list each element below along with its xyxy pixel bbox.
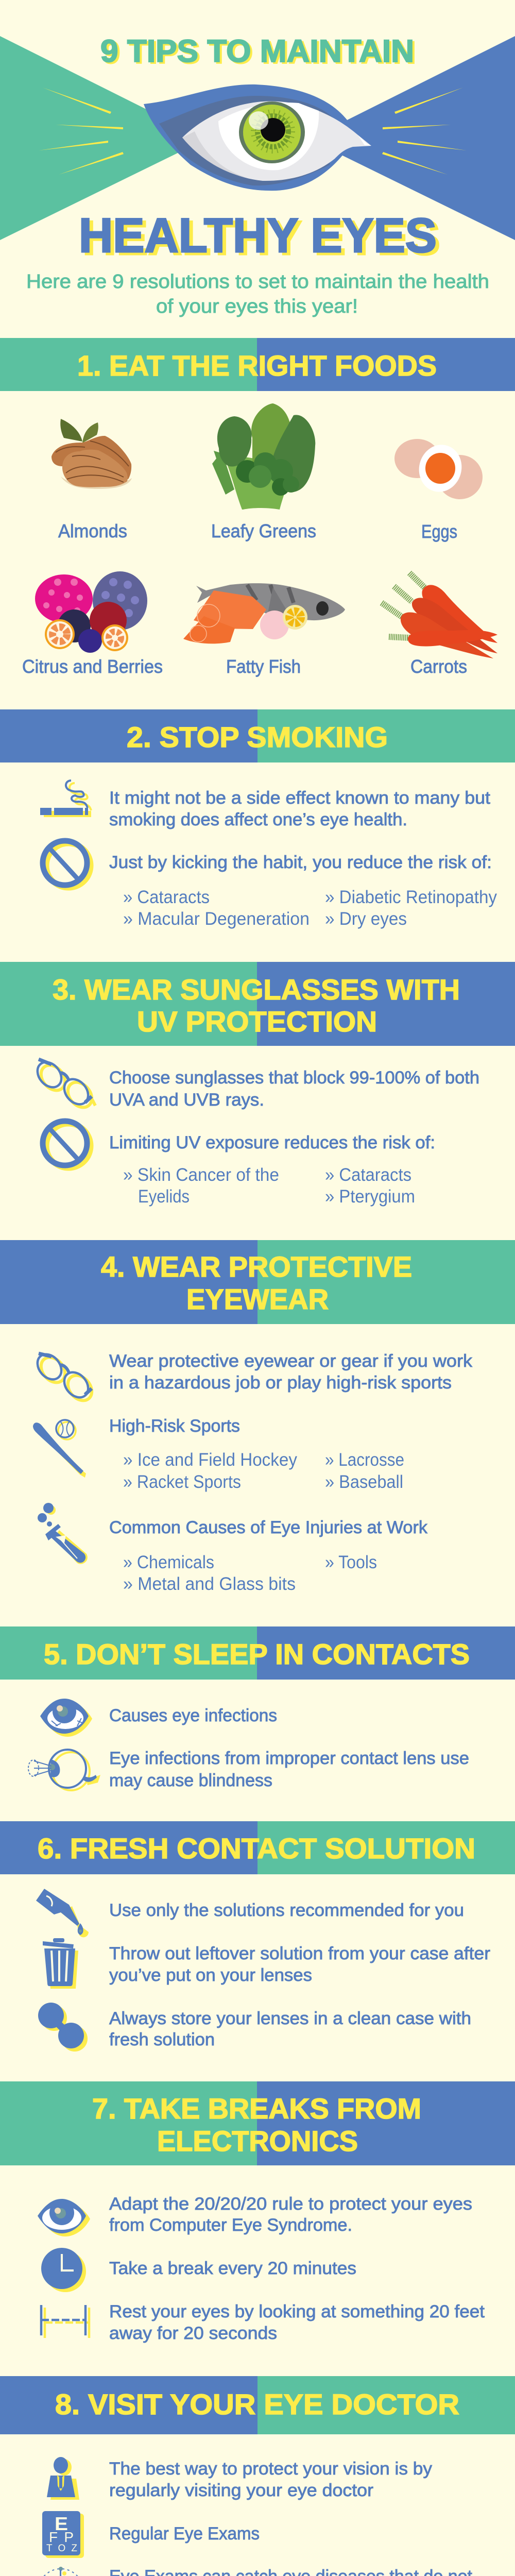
food: fatty fish [183, 583, 345, 643]
text: smoking: Just by kicking the habit, you reduce the risk of: [109, 853, 492, 872]
icon: eye chart: T O Z [46, 2543, 77, 2554]
section 6: fresh contact solution [0, 1821, 515, 2052]
text: protective eyewear: in a hazardous job or play high-risk sports [109, 1373, 452, 1393]
text: doctor [109, 2459, 473, 2576]
list: smoking risks: » Macular Degeneration [123, 909, 310, 929]
list: causes at work [123, 1552, 377, 1594]
section 7: take breaks from electronics [0, 2081, 515, 2343]
text: sunglasses: UVA and UVB rays. [109, 1090, 264, 1110]
heading band 4 [0, 1240, 515, 1324]
food labels: Leafy Greens [211, 520, 316, 541]
icon: eye chart: F P [49, 2529, 74, 2545]
list: high-risk sports: » Racket Sports [123, 1472, 241, 1492]
icon: doctor [47, 2457, 79, 2500]
heading band 4: EYEWEAR [186, 1283, 329, 1315]
text: sunglasses: Limiting UV exposure reduces the risk of: [109, 1133, 435, 1153]
food labels: Fatty Fish [226, 656, 301, 677]
heading band 2 [0, 709, 515, 762]
heading band 3: 3. WEAR SUNGLASSES WITH [53, 973, 460, 1006]
eye illustration [144, 84, 371, 191]
subtitle [26, 271, 489, 317]
header panel [0, 33, 515, 317]
text: doctor: The best way to protect your vision is by [109, 2459, 432, 2479]
text: breaks: away for 20 seconds [109, 2324, 277, 2343]
text: doctor: Regular Eye Exams [109, 2524, 260, 2544]
text: protective eyewear: Common Causes of Eye Injuries at Work [109, 1518, 428, 1537]
heading band 8 [0, 2376, 515, 2434]
text: breaks: Adapt the 20/20/20 rule to protect your eyes [109, 2194, 472, 2214]
title line 1: 9 TIPS TO MAINTAIN [102, 35, 416, 70]
list: smoking risks: » Dry eyes [325, 909, 407, 929]
section 3: wear sunglasses [0, 962, 515, 1207]
text: contacts: Eye infections from improper contact lens use [109, 1749, 469, 1768]
text: smoking: smoking does affect one’s eye health. [109, 810, 407, 829]
section 5: don't sleep in contacts [0, 1626, 515, 1790]
icon: bat and ball [33, 1420, 86, 1478]
text: breaks: Take a break every 20 minutes [109, 2259, 356, 2278]
text: solution [109, 1901, 490, 2049]
text: contacts: may cause blindness [109, 1771, 272, 1790]
section 8: visit your eye doctor [0, 2376, 515, 2576]
heading band 5: 5. DON’T SLEEP IN CONTACTS [44, 1638, 470, 1670]
list: high-risk sports: » Lacrosse [325, 1450, 404, 1470]
section 1: eat the right foods [0, 338, 515, 677]
list: smoking risks [123, 887, 497, 929]
heading band 1: 1. EAT THE RIGHT FOODS [77, 349, 437, 382]
text: breaks [109, 2194, 485, 2343]
icon: solution bottle [36, 1889, 89, 1937]
title line 2: HEALTHY EYES [79, 208, 437, 262]
list: UV risks: » Skin Cancer of the [123, 1165, 279, 1185]
list: causes at work: » Metal and Glass bits [123, 1574, 296, 1594]
food: citrus and berries [35, 571, 147, 653]
list: UV risks: » Pterygium [325, 1187, 415, 1207]
list: causes at work: » Chemicals [123, 1552, 214, 1572]
section 4: protective eyewear [0, 1240, 515, 1594]
icon: eyeball cross-section [28, 1750, 100, 1790]
heading band 3: UV PROTECTION [137, 1005, 377, 1038]
food: carrots [382, 573, 497, 658]
heading band 8: 8. VISIT YOUR EYE DOCTOR [55, 2388, 459, 2420]
text: solution: Always store your lenses in a clean case with [109, 2009, 471, 2028]
text: solution: Throw out leftover solution from your case after [109, 1944, 490, 1963]
food: leafy greens [212, 403, 315, 510]
icon: no sign [43, 841, 91, 888]
icon: no sign [43, 1121, 91, 1168]
text: breaks: Rest your eyes by looking at something 20 feet [109, 2302, 485, 2321]
text: protective eyewear: Wear protective eyewear or gear if you work [109, 1351, 473, 1371]
heading band 6: 6. FRESH CONTACT SOLUTION [38, 1832, 475, 1865]
food: almonds [52, 419, 132, 489]
text: contacts [109, 1706, 469, 1790]
text: solution: you’ve put on your lenses [109, 1965, 312, 1985]
text: protective eyewear [109, 1351, 473, 1537]
food labels: Almonds [58, 520, 127, 541]
icon: contact lens case [38, 2003, 88, 2052]
icon: infected eye [40, 1699, 92, 1737]
heading band 6 [0, 1821, 515, 1874]
heading band 1 [0, 338, 515, 391]
text: smoking: It might not be a side effect known to many but [109, 788, 491, 808]
icon: test tube [38, 1503, 88, 1564]
list: UV risks: » Cataracts [325, 1165, 411, 1185]
text: doctor: regularly visiting your eye doctor [109, 2481, 373, 2500]
icon: eye chart: E [55, 2513, 68, 2534]
text: breaks: from Computer Eye Syndrome. [109, 2215, 352, 2235]
icon: cigarette [40, 781, 91, 817]
heading band 7 [0, 2081, 515, 2165]
list: causes at work: » Tools [325, 1552, 377, 1572]
text: contacts: Causes eye infections [109, 1706, 277, 1725]
icon: eye [38, 2199, 90, 2236]
icon: phoropter [34, 2567, 92, 2576]
list: high-risk sports: » Ice and Field Hockey [123, 1450, 297, 1470]
food labels: Citrus and Berries [22, 656, 163, 677]
icon: glasses [32, 1057, 97, 1112]
text: solution: Use only the solutions recommended for you [109, 1901, 464, 1920]
food labels [22, 520, 467, 677]
text: smoking [109, 788, 492, 872]
food labels: Eggs [421, 521, 457, 542]
list: smoking risks: » Diabetic Retinopathy [325, 887, 497, 907]
list: UV risks [123, 1165, 415, 1207]
heading band 7: 7. TAKE BREAKS FROM [92, 2092, 421, 2125]
icon: trash can [43, 1938, 78, 1989]
list: smoking risks: » Cataracts [123, 887, 210, 907]
blue ray panel [309, 36, 515, 240]
text: solution: fresh solution [109, 2030, 215, 2049]
icon: clock [41, 2248, 86, 2292]
list: high-risk sports: » Baseball [325, 1472, 403, 1492]
list: UV risks: Eyelids [138, 1187, 190, 1207]
food labels: Carrots [410, 656, 467, 677]
section 2: stop smoking [0, 709, 515, 929]
heading band 4: 4. WEAR PROTECTIVE [101, 1250, 412, 1283]
heading band 7: ELECTRONICS [157, 2125, 358, 2157]
text: sunglasses [109, 1068, 479, 1153]
heading band 5 [0, 1626, 515, 1680]
title line 1: 9 TIPS TO MAINTAIN [100, 33, 414, 69]
food: eggs [394, 439, 483, 499]
icon: eye chart [42, 2511, 84, 2558]
heading band 2: 2. STOP SMOKING [127, 721, 388, 753]
icon: safety glasses [32, 1349, 97, 1405]
subtitle: of your eyes this year! [156, 296, 358, 317]
title line 2: HEALTHY EYES [82, 211, 440, 265]
text: sunglasses: Choose sunglasses that block 99-100% of both [109, 1068, 479, 1088]
icon: distance measure [41, 2305, 89, 2338]
heading band 3 [0, 962, 515, 1046]
iris [239, 101, 305, 163]
green ray panel [0, 36, 206, 240]
yellow rays [39, 88, 467, 175]
list: high-risk sports [123, 1450, 404, 1492]
text: protective eyewear: High-Risk Sports [109, 1416, 240, 1436]
subtitle: Here are 9 resolutions to set to maintain the health [26, 271, 489, 293]
